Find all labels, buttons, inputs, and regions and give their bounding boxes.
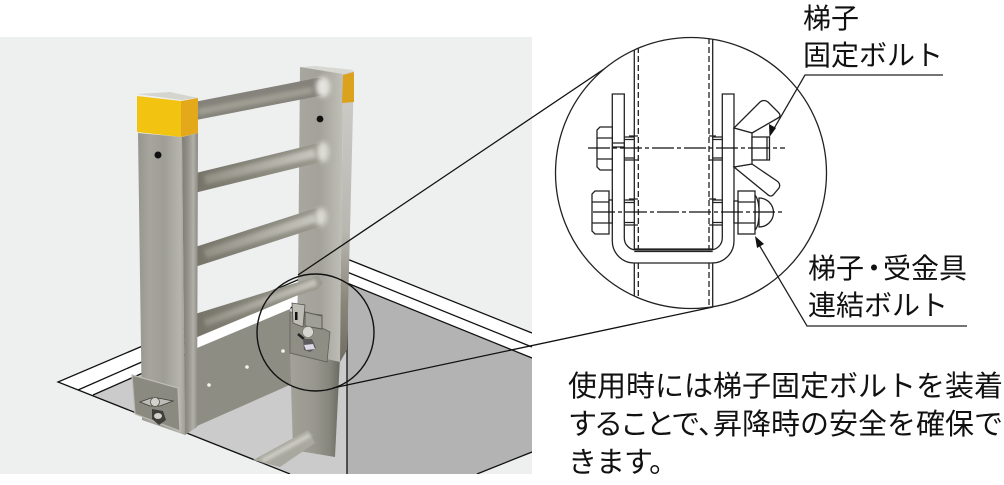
description text: 昇降時の安全を確保で [713,408,1003,441]
description text: きます。 [568,447,677,479]
body [734,128,752,167]
ladder stile lines [634,38,713,308]
callout line lower [333,307,713,388]
frame lines [58,259,532,474]
upper hex bolt head [597,127,624,170]
label: ladder and receiver connecting bolt: 連結ボルト [808,290,948,321]
side face [340,71,354,362]
upper spacers [624,136,722,160]
flange [755,195,759,230]
leader: ladder fixing bolt [769,75,943,137]
label: ladder fixing bolt [803,3,943,71]
plate holes [207,349,285,387]
rung 4 [195,276,323,338]
wing nut [140,398,173,425]
left bracket [132,375,180,431]
dome [759,198,774,227]
pit shadow right [347,283,532,474]
rung 1 [195,77,330,112]
description text: することで [568,409,698,441]
detail circle [556,38,826,308]
wing nut [734,100,780,196]
front face [138,133,185,435]
centre lines [588,148,785,212]
description text [568,370,1003,479]
label: ladder fixing bolt: 固定ボルト [803,40,943,71]
top wing [734,100,780,133]
right stile [290,66,354,457]
U inner double line [634,249,713,252]
side face [182,133,198,435]
lower spacers [624,199,722,225]
label: ladder and receiver connecting bolt: 梯子・受金具 [808,253,967,284]
top face [137,92,198,100]
yellow cap side [181,98,198,137]
cap nut [734,191,774,234]
yellow cap front [137,96,181,137]
callout line upper [298,63,613,275]
yellow cap side [342,72,354,103]
wing nut [303,339,316,352]
bolt end [752,137,770,160]
rung 3 [195,208,327,257]
description text: 、 [698,409,727,441]
bracket body [290,312,330,362]
upper front face [295,67,343,362]
background panel [0,37,532,474]
white gap above plate [197,294,296,348]
detail circle on ladder [257,274,374,391]
slotted plate [292,303,305,327]
label: ladder fixing bolt: 梯子 [803,3,859,34]
lower section [290,352,340,457]
nut slit [298,334,304,339]
slot [295,312,298,320]
washer [734,201,738,223]
detail drawing [556,38,826,308]
label: ladder and receiver connecting bolt [808,253,967,321]
U bracket [612,94,734,263]
lower hex bolt head [592,191,612,234]
description text: 使用時には梯子固定ボルトを装着 [568,370,1003,403]
bolt [302,326,314,338]
nut [738,191,755,234]
hole [317,116,323,122]
left stile [137,92,198,435]
floor opening [58,259,532,474]
ladder photo [132,66,354,467]
receiver plate [197,308,292,426]
square plate [305,312,322,329]
bottom wing [734,164,780,196]
pit shadow left [93,283,347,474]
rung 2 [195,142,329,183]
rung 5 [253,430,315,467]
leader: connecting bolt [755,236,967,326]
top face [300,66,354,74]
hole [154,152,162,158]
white opening frame [58,259,532,395]
fixing bracket [290,303,330,362]
rungs [195,77,330,467]
drawing parts [588,38,785,308]
